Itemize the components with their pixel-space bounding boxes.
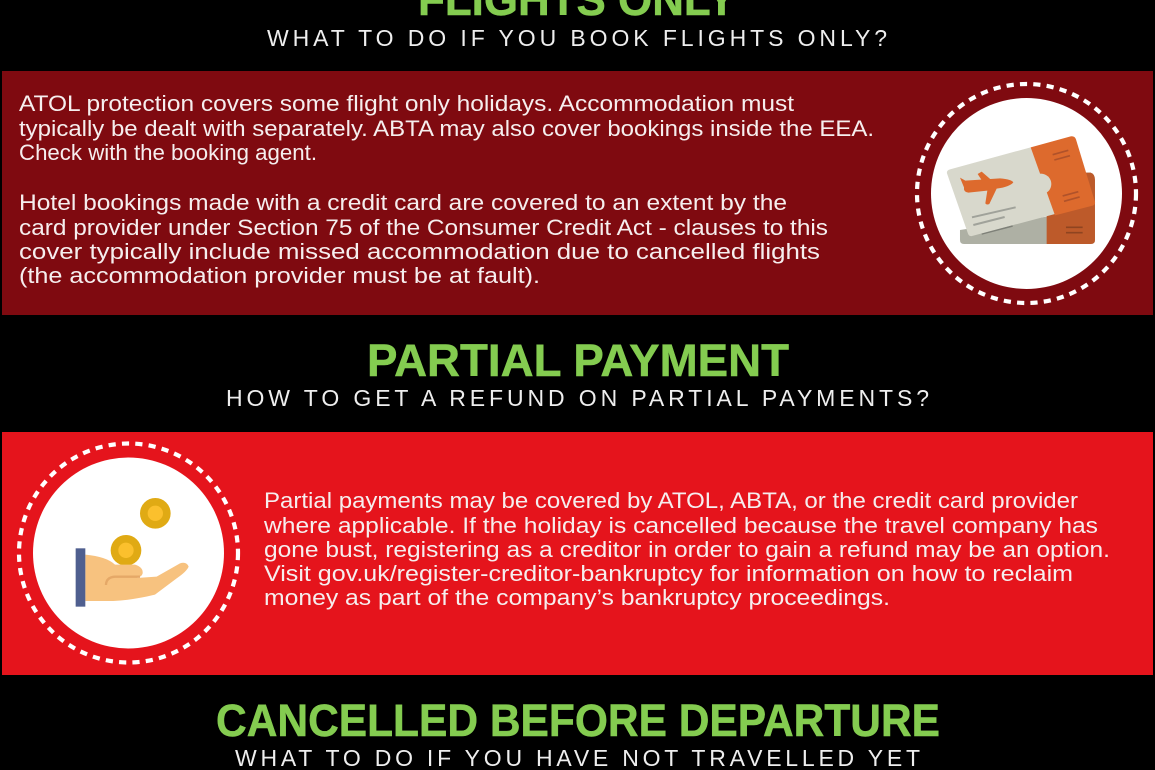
text block: hotel bookings: cover typically include missed accommodation due to cancelled flights [19, 239, 820, 264]
heading: cancelled before departure: CANCELLED BEFORE DEPARTURE [216, 695, 940, 746]
subheading: flights only: WHAT TO DO IF YOU BOOK FLIGHTS ONLY? [267, 25, 887, 51]
icon: hand with coins [19, 444, 238, 662]
subheading: partial payment: HOW TO GET A REFUND ON PARTIAL PAYMENTS? [226, 385, 929, 411]
icon: plane tickets [917, 84, 1136, 303]
text block: partial payments: Partial payments may be covered by ATOL, ABTA, or the credit card provider [264, 488, 1078, 513]
panel: flights only [2, 71, 1153, 315]
text block: ATOL protection: ATOL protection covers some flight only holidays. Accommodation must [19, 91, 794, 116]
text block: partial payments: gone bust, registering as a creditor in order to gain a refund may be an option. [264, 537, 1110, 562]
text block: ATOL protection: Check with the booking agent. [19, 140, 317, 165]
text block: ATOL protection: typically be dealt with separately. ABTA may also cover bookings inside the EEA. [19, 116, 874, 141]
text block: hotel bookings: card provider under Section 75 of the Consumer Credit Act - clauses to this [19, 215, 828, 240]
text block: ATOL protection [19, 91, 874, 165]
text block: hotel bookings [19, 190, 828, 288]
text block: partial payments: Visit gov.uk/register-creditor-bankruptcy for information on how to reclaim [264, 561, 1073, 586]
text block: hotel bookings: (the accommodation provider must be at fault). [19, 263, 540, 288]
text block: partial payments: money as part of the company’s bankruptcy proceedings. [264, 585, 890, 610]
panel: partial payment [2, 432, 1153, 675]
text block: partial payments [263, 488, 1110, 610]
text block: partial payments: where applicable. If the holiday is cancelled because the travel company has [263, 513, 1098, 538]
text block: hotel bookings: Hotel bookings made with a credit card are covered to an extent by the [19, 190, 787, 215]
heading: partial payment: PARTIAL PAYMENT [367, 335, 789, 386]
